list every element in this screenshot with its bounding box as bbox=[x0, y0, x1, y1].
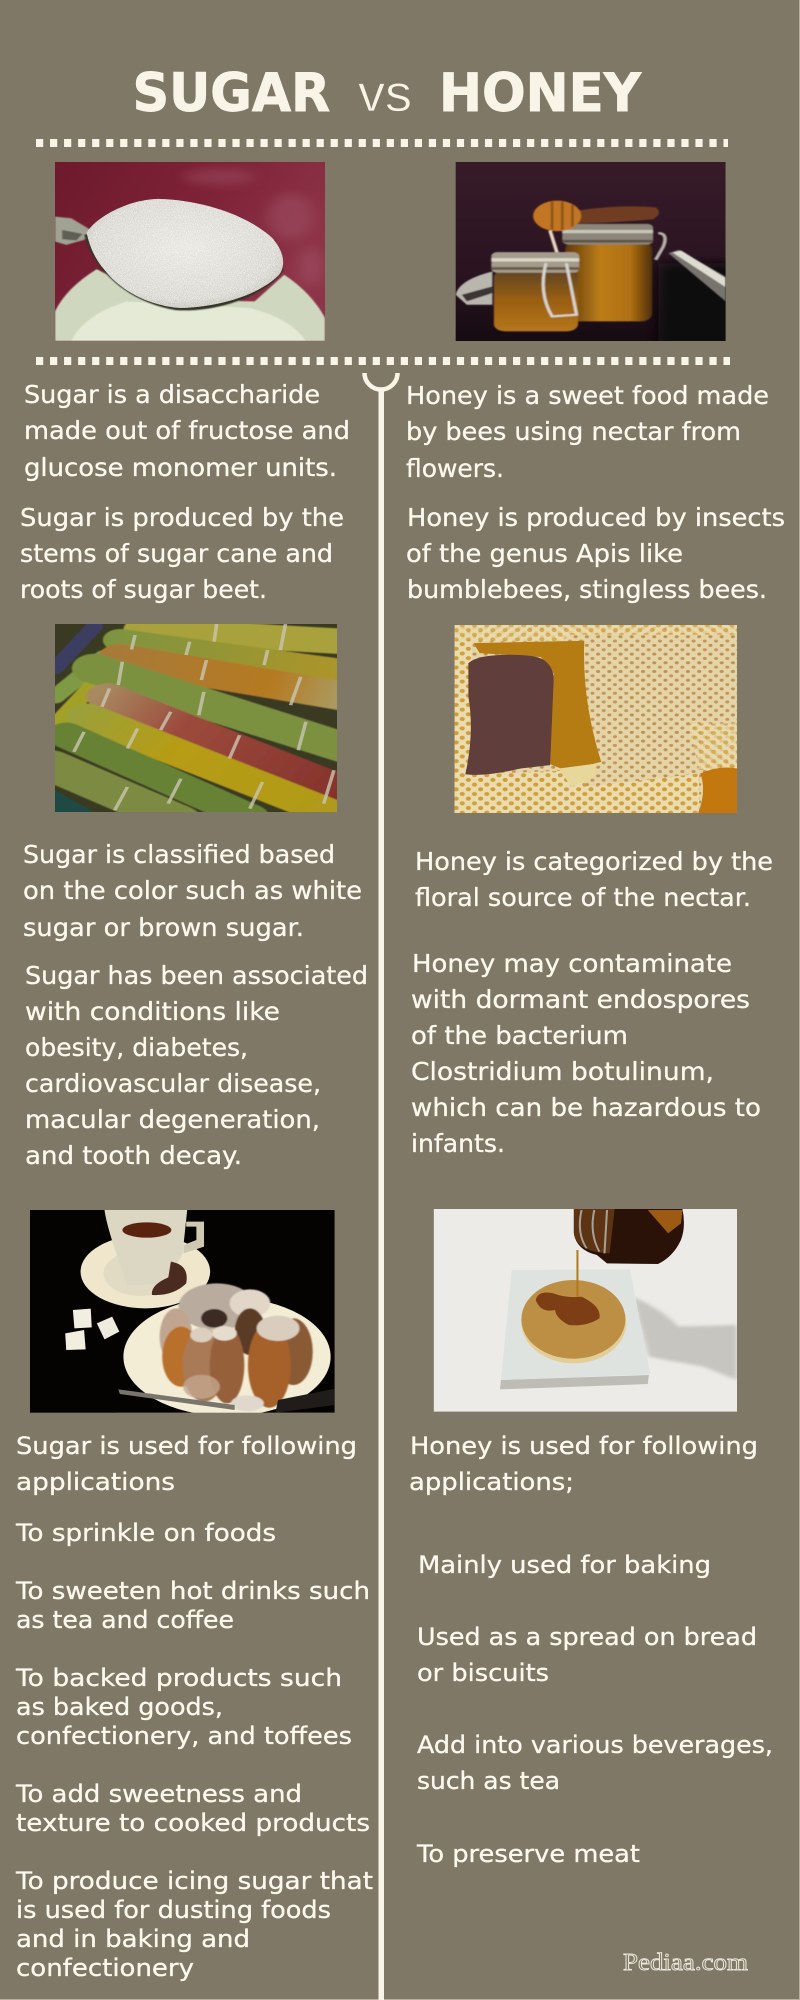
text: honey applications intro: Honey is used for following bbox=[410, 1432, 758, 1460]
text: honey definition: flowers. bbox=[406, 454, 504, 483]
panel: sugar column text bbox=[15, 380, 373, 1982]
text: sugar definition: Sugar is a disaccharide bbox=[24, 380, 320, 409]
text: honey classification bbox=[415, 847, 773, 912]
text: sugar classification: on the color such as white bbox=[23, 876, 362, 905]
text: sugar source: roots of sugar beet. bbox=[20, 575, 267, 604]
text: sugar use cooked: To add sweetness and bbox=[15, 1780, 302, 1808]
photo: bundt cake and tea bbox=[30, 1210, 335, 1413]
text: honey health: infants. bbox=[411, 1129, 505, 1158]
text: honey use baking: Mainly used for baking bbox=[418, 1551, 711, 1579]
text: sugar classification: Sugar is classified based bbox=[23, 840, 335, 869]
text: sugar health: obesity, diabetes, bbox=[25, 1033, 248, 1062]
text: sugar use icing: To produce icing sugar that bbox=[15, 1867, 373, 1895]
text: sugar health: and tooth decay. bbox=[25, 1141, 242, 1170]
text: honey applications intro bbox=[409, 1432, 758, 1496]
text: honey use spread bbox=[417, 1623, 757, 1687]
text: sugar health: Sugar has been associated bbox=[25, 961, 368, 990]
text: sugar health: with conditions like bbox=[25, 997, 280, 1026]
text: sugar use cooked: texture to cooked products bbox=[16, 1809, 370, 1837]
text: honey use spread: Used as a spread on bread bbox=[417, 1623, 757, 1651]
panel: honey column text bbox=[406, 381, 785, 1868]
text: sugar use icing: and in baking and bbox=[16, 1925, 250, 1953]
text: sugar use baked: as baked goods, bbox=[16, 1693, 223, 1721]
title: SUGAR bbox=[133, 63, 330, 124]
title bbox=[133, 63, 642, 124]
text: honey use preserve: To preserve meat bbox=[416, 1840, 640, 1868]
logo: Pediaa.com: Pediaa.com bbox=[623, 1950, 748, 1976]
text: sugar use sweeten: as tea and coffee bbox=[16, 1606, 234, 1634]
text: honey health: of the bacterium bbox=[411, 1021, 628, 1050]
text: sugar health bbox=[25, 961, 368, 1170]
text: honey source: of the genus Apis like bbox=[406, 539, 683, 568]
photo: sugar cane stalks bbox=[55, 624, 337, 812]
text: sugar use cooked bbox=[15, 1780, 370, 1837]
text: sugar applications intro: Sugar is used for following bbox=[16, 1432, 357, 1460]
text: sugar use icing: confectionery bbox=[16, 1954, 194, 1982]
text: honey health: Clostridium botulinum, bbox=[411, 1057, 714, 1086]
photo: spoon of sugar bbox=[55, 162, 325, 341]
text: sugar source: Sugar is produced by the bbox=[20, 503, 344, 532]
text: honey use beverages bbox=[417, 1731, 773, 1795]
text: honey definition bbox=[406, 381, 769, 483]
text: sugar health: cardiovascular disease, bbox=[25, 1069, 321, 1098]
text: sugar definition: glucose monomer units. bbox=[24, 453, 337, 482]
text: honey source bbox=[406, 503, 785, 604]
photo: honeycomb bbox=[454, 625, 737, 813]
text: honey health: which can be hazardous to bbox=[411, 1093, 761, 1122]
text: sugar use sweeten: To sweeten hot drinks such bbox=[15, 1577, 370, 1605]
center divider with cap bbox=[364, 373, 398, 2000]
text: honey source: Honey is produced by insects bbox=[407, 503, 785, 532]
text: honey use beverages: Add into various beverages, bbox=[417, 1731, 773, 1759]
text: honey use spread: or biscuits bbox=[417, 1659, 549, 1687]
text: sugar applications intro bbox=[16, 1432, 357, 1496]
title: HONEY bbox=[439, 63, 642, 124]
text: honey applications intro: applications; bbox=[409, 1468, 574, 1496]
text: sugar health: macular degeneration, bbox=[25, 1105, 320, 1134]
text: sugar use baked bbox=[15, 1664, 352, 1750]
text: sugar applications intro: applications bbox=[16, 1468, 175, 1496]
text: sugar definition: made out of fructose and bbox=[24, 416, 350, 445]
text: sugar use icing: is used for dusting foods bbox=[16, 1896, 331, 1924]
text: sugar use sweeten bbox=[15, 1577, 370, 1634]
text: sugar use sprinkle: To sprinkle on foods bbox=[15, 1519, 276, 1547]
text: honey health: with dormant endospores bbox=[411, 985, 750, 1014]
text: sugar classification: sugar or brown sugar. bbox=[23, 913, 304, 942]
text: honey source: bumblebees, stingless bees. bbox=[407, 575, 767, 604]
text: honey definition: by bees using nectar from bbox=[406, 417, 741, 446]
text: sugar use icing bbox=[15, 1867, 373, 1982]
text: honey classification: Honey is categorized by the bbox=[415, 847, 773, 876]
text: sugar use baked: To backed products such bbox=[15, 1664, 342, 1692]
text: honey health: Honey may contaminate bbox=[412, 949, 732, 978]
text: honey use beverages: such as tea bbox=[417, 1767, 560, 1795]
text: sugar use baked: confectionery, and toffees bbox=[16, 1722, 352, 1750]
text: honey definition: Honey is a sweet food made bbox=[406, 381, 769, 410]
text: sugar classification bbox=[23, 840, 362, 942]
title: vs bbox=[358, 65, 412, 123]
text: sugar source: stems of sugar cane and bbox=[20, 539, 333, 568]
text: sugar source bbox=[20, 503, 344, 604]
text: honey health bbox=[411, 949, 761, 1158]
text: honey classification: floral source of the nectar. bbox=[415, 883, 751, 912]
photo: honey jars bbox=[456, 162, 726, 341]
photo: syrup on pancake bbox=[434, 1209, 737, 1412]
text: sugar definition bbox=[24, 380, 350, 482]
